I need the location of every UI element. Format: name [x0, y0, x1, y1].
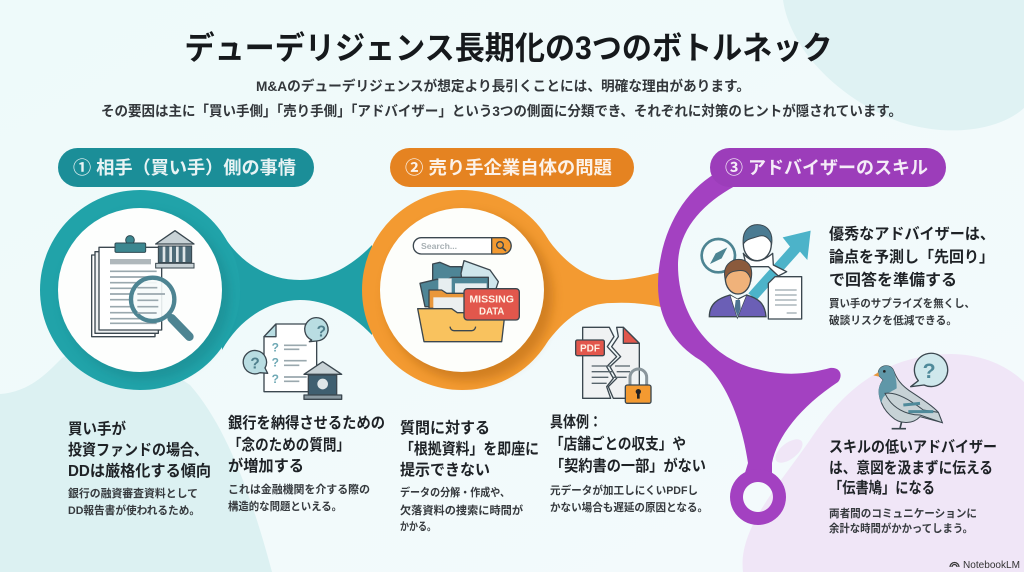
text: bank questions: 「念のための質問」: [228, 436, 350, 454]
text: evidence: データの分解・作成や、: [400, 485, 510, 499]
text: buyer fund: 銀行の融資審査資料として: [68, 486, 198, 500]
icon: search bar and folder with missing data: DATA: [479, 306, 504, 317]
pill: advisor: [710, 148, 946, 187]
text: buyer fund: 投資ファンドの場合、: [68, 440, 208, 459]
orange connector and ring: [362, 190, 665, 390]
pill: buyer side: ① 相手（買い手）側の事情: [73, 158, 296, 178]
text: advisor poor heading: スキルの低いアドバイザー: [829, 438, 997, 456]
text: advisor good detail: 破談リスクを低減できる。: [829, 313, 957, 327]
text: advisor good heading: で回答を準備する: [829, 270, 957, 289]
icon: document with questions and bank: ?: [272, 372, 279, 386]
text: buyer fund: [68, 419, 211, 517]
text: concrete example: 「店舗ごとの収支」や: [550, 434, 686, 453]
text: advisor good heading: 論点を予測し「先回り」: [829, 247, 994, 266]
title: デューデリジェンス長期化の3つのボトルネック: [184, 30, 832, 66]
icon: document with questions and bank: ?: [272, 356, 279, 370]
text: buyer fund: DD報告書が使われるため。: [68, 503, 200, 517]
text: evidence: 質問に対する: [400, 419, 490, 437]
icon: document with questions and bank: ?: [250, 356, 260, 373]
text: advisor poor heading: [829, 438, 997, 497]
pill: buyer side: [58, 148, 314, 187]
text: buyer fund: 買い手が: [68, 419, 126, 438]
text: advisor poor detail: [829, 506, 977, 535]
text: bank questions: [228, 414, 385, 513]
text: evidence: 欠落資料の捜索に時間が: [400, 503, 523, 517]
pill: seller side: [390, 148, 634, 187]
text: buyer fund: DDは厳格化する傾向: [68, 461, 211, 480]
intro text: その要因は主に「買い手側」「売り手側」「アドバイザー」という3つの側面に分類でき、それぞれに対策のヒントが隠されています。: [101, 103, 902, 119]
icon: carrier pigeon with question bubble: ?: [923, 359, 936, 383]
icon: torn PDF with lock: PDF: [580, 344, 600, 355]
intro text: [101, 78, 902, 119]
text: concrete example: 具体例：: [550, 413, 602, 431]
text: bank questions: 銀行を納得させるための: [228, 414, 385, 432]
purple ring and tail: [658, 170, 841, 525]
text: bank questions: が増加する: [228, 456, 304, 475]
text: concrete example: 元データが加工しにくいPDFし: [550, 483, 698, 497]
text: advisor poor heading: 「伝書鳩」になる: [829, 478, 935, 497]
text: advisor good detail: 買い手のサプライズを無くし、: [829, 296, 975, 310]
icon: torn PDF with lock: [576, 327, 651, 403]
text: advisor poor detail: 余計な時間がかかってしまう。: [829, 521, 973, 535]
icon: search bar and folder with missing data: Search...: [421, 241, 457, 251]
text: bank questions: 構造的な問題といえる。: [228, 499, 342, 513]
text: advisor poor heading: は、意図を汲まずに伝える: [829, 459, 993, 477]
text: concrete example: かない場合も遅延の原因となる。: [550, 500, 708, 514]
text: evidence: 「根拠資料」を即座に: [400, 439, 539, 458]
icon: document with questions and bank: ?: [317, 324, 326, 341]
text: evidence: かかる。: [400, 520, 436, 533]
text: advisor poor detail: 両者間のコミュニケーションに: [829, 506, 977, 520]
text: advisor good detail: [829, 296, 975, 327]
icon: clipboard with bank and magnifier: [92, 231, 194, 337]
icon: carrier pigeon with question bubble: [873, 353, 948, 429]
text: evidence: [400, 419, 539, 533]
icon: document with questions and bank: [243, 318, 342, 399]
text: concrete example: [550, 413, 708, 514]
icon: search bar and folder with missing data: [413, 238, 519, 342]
text: advisor good heading: [829, 225, 995, 289]
text: concrete example: 「契約書の一部」がない: [550, 456, 706, 475]
text: bank questions: これは金融機関を介する際の: [228, 482, 370, 496]
teal connector and ring: [40, 190, 372, 390]
text: evidence: 提示できない: [400, 461, 490, 479]
brand: NotebookLM: NotebookLM: [963, 559, 1020, 571]
icon: search bar and folder with missing data: MISSING: [469, 294, 514, 305]
icon: document with questions and bank: ?: [272, 341, 279, 355]
pill: advisor: ③ アドバイザーのスキル: [725, 158, 928, 178]
icon: advisor with compass, arrow and document: [702, 225, 811, 319]
pill: seller side: ② 売り手企業自体の問題: [405, 158, 612, 178]
text: advisor good heading: 優秀なアドバイザーは、: [829, 225, 995, 243]
intro text: M&Aのデューデリジェンスが想定より長引くことには、明確な理由があります。: [256, 78, 750, 94]
